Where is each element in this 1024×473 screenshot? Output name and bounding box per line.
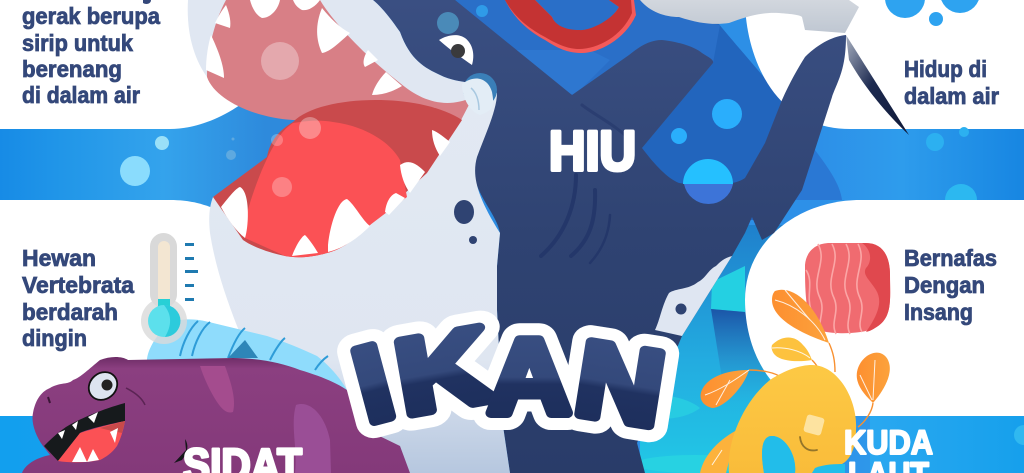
text: organ gerak: berenang xyxy=(22,56,122,82)
shark lower palate xyxy=(213,100,462,257)
label: KUDA LAUT: KUDA xyxy=(844,424,933,462)
text: insang: Bernafas xyxy=(904,245,997,271)
text: insang: Dengan xyxy=(904,272,985,298)
bubbles over shark fin xyxy=(671,99,742,204)
eel body xyxy=(22,357,410,473)
title: IKAN: N xyxy=(568,318,672,449)
seahorse eye xyxy=(800,437,817,450)
blue cloth behind eel xyxy=(147,319,347,390)
eel eye xyxy=(83,366,123,406)
text: vertebrata: Vertebrata xyxy=(22,272,134,298)
shark belly spots xyxy=(454,200,474,224)
label: HIU: HIU xyxy=(549,119,636,182)
text: vertebrata: Hewan xyxy=(22,245,96,271)
white panel: top left xyxy=(0,0,240,129)
shark eye xyxy=(439,35,473,65)
eel xyxy=(22,357,410,473)
title: IKAN: N xyxy=(568,318,672,449)
seahorse xyxy=(700,290,890,473)
shark upper fin grey xyxy=(640,0,859,33)
text: organ gerak: di dalam air xyxy=(22,82,140,108)
background: central blue panel xyxy=(170,0,870,473)
title: IKAN: I xyxy=(342,322,404,445)
eel body patches xyxy=(200,366,234,413)
shark upper jaw xyxy=(188,0,497,118)
title: IKAN xyxy=(342,305,672,449)
text: habitat: Hidup di xyxy=(904,56,987,82)
bubbles: upper band right xyxy=(926,127,977,200)
text: habitat xyxy=(904,56,999,109)
shark gills xyxy=(541,105,625,263)
text: vertebrata: dingin xyxy=(22,325,87,351)
seahorse stems and veins xyxy=(749,343,873,427)
text: habitat: dalam air xyxy=(904,83,999,109)
text: insang: Insang xyxy=(904,299,973,325)
bubbles: upper band left xyxy=(120,136,236,186)
text: vertebrata: berdarah xyxy=(22,299,118,325)
shark body xyxy=(373,0,846,473)
shark bubbles in mouth xyxy=(261,42,321,197)
shark bubbles on head xyxy=(437,12,459,34)
shark fin edge xyxy=(655,256,732,336)
eel mouth xyxy=(44,403,125,461)
shark upper teeth xyxy=(206,0,435,118)
eel fin spike xyxy=(174,439,187,463)
title: IKAN: K xyxy=(387,305,500,438)
shark upper palate xyxy=(207,0,473,122)
bubbles: top right xyxy=(885,0,980,26)
text: organ gerak: gerak berupa xyxy=(22,3,160,29)
icon: thermometer xyxy=(141,233,198,344)
text: organ gerak: sirip untuk xyxy=(22,30,133,56)
title: IKAN: A xyxy=(488,318,571,436)
seahorse inner shape xyxy=(762,436,795,473)
eel brow xyxy=(126,388,145,405)
shark belly xyxy=(209,93,510,473)
title: IKAN: A xyxy=(488,318,571,436)
icon: gill / salmon texture xyxy=(805,243,890,334)
seahorse body xyxy=(729,365,856,473)
white panel: lower right xyxy=(745,200,1024,416)
bubble: lower band right xyxy=(1014,425,1024,445)
title: IKAN: I xyxy=(342,322,404,445)
text: vertebrata xyxy=(22,245,134,351)
shark lower teeth xyxy=(221,130,450,256)
title: IKAN: K xyxy=(387,305,500,438)
text: insang xyxy=(904,245,997,325)
shark xyxy=(188,0,909,473)
shark tail tip xyxy=(846,35,909,135)
shark snout xyxy=(462,78,493,115)
white panel: lower left xyxy=(0,200,300,416)
red ring xyxy=(505,0,636,53)
blue band: upper xyxy=(0,129,1024,200)
seahorse highlight xyxy=(803,414,825,436)
text: organ gerak xyxy=(22,0,160,108)
shark tongue xyxy=(245,121,407,257)
blue band: lower xyxy=(0,416,1024,473)
shark light stripes xyxy=(500,50,610,95)
shark blue back panel xyxy=(455,0,720,148)
seahorse leaves xyxy=(701,290,890,408)
eel teeth xyxy=(58,412,118,462)
white panel: top right xyxy=(745,0,1024,129)
